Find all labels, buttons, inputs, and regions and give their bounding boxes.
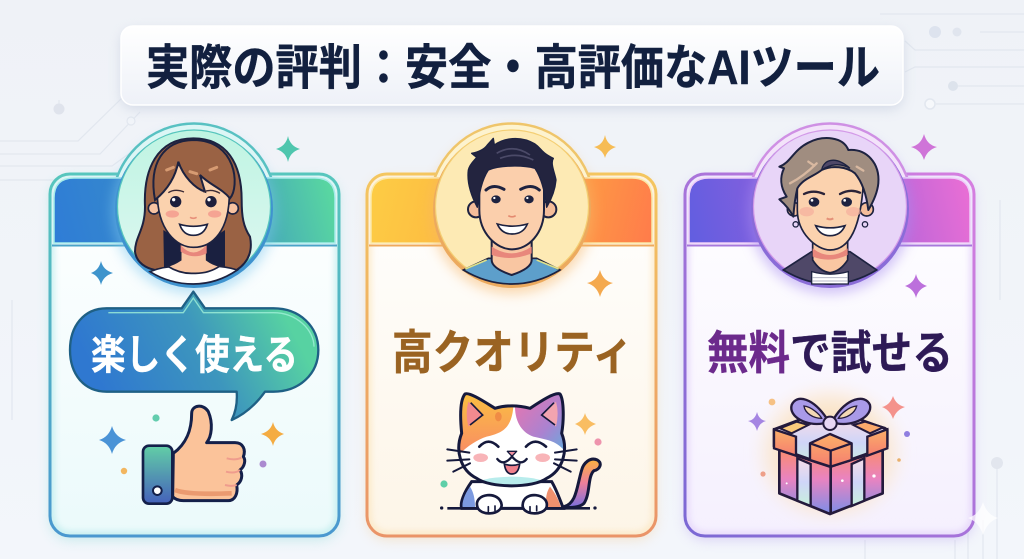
icon: calico cat (440, 390, 600, 513)
card heading: で試せる (790, 327, 953, 379)
card header band (371, 178, 652, 243)
title text: 実際の評判：安全・高評価なAIツール (146, 42, 880, 95)
card heading: 高クオリティ (392, 326, 633, 379)
avatar: woman (112, 124, 276, 294)
card heading: 無料 (707, 327, 790, 379)
panel: card 1 楽しく使える (50, 124, 339, 540)
title panel (121, 26, 903, 109)
watermark sparkle (968, 502, 998, 535)
sparkles and dots card 1 (91, 136, 300, 474)
card header band (54, 178, 335, 243)
card heading (707, 327, 953, 379)
panel: card 2 高クオリティ (367, 124, 656, 540)
sparkles and dots card 2 (440, 135, 616, 488)
panel: card 3 無料で試せる (685, 124, 974, 540)
sparkles and dots card 3 (748, 134, 937, 477)
avatar: young man (748, 124, 912, 294)
icon: gift box (750, 380, 910, 527)
avatar: man (430, 124, 594, 294)
card header band (689, 178, 970, 243)
icon: thumbs up (143, 406, 245, 504)
speech bubble (70, 292, 318, 420)
bubble text: 楽しく使える (91, 332, 298, 378)
